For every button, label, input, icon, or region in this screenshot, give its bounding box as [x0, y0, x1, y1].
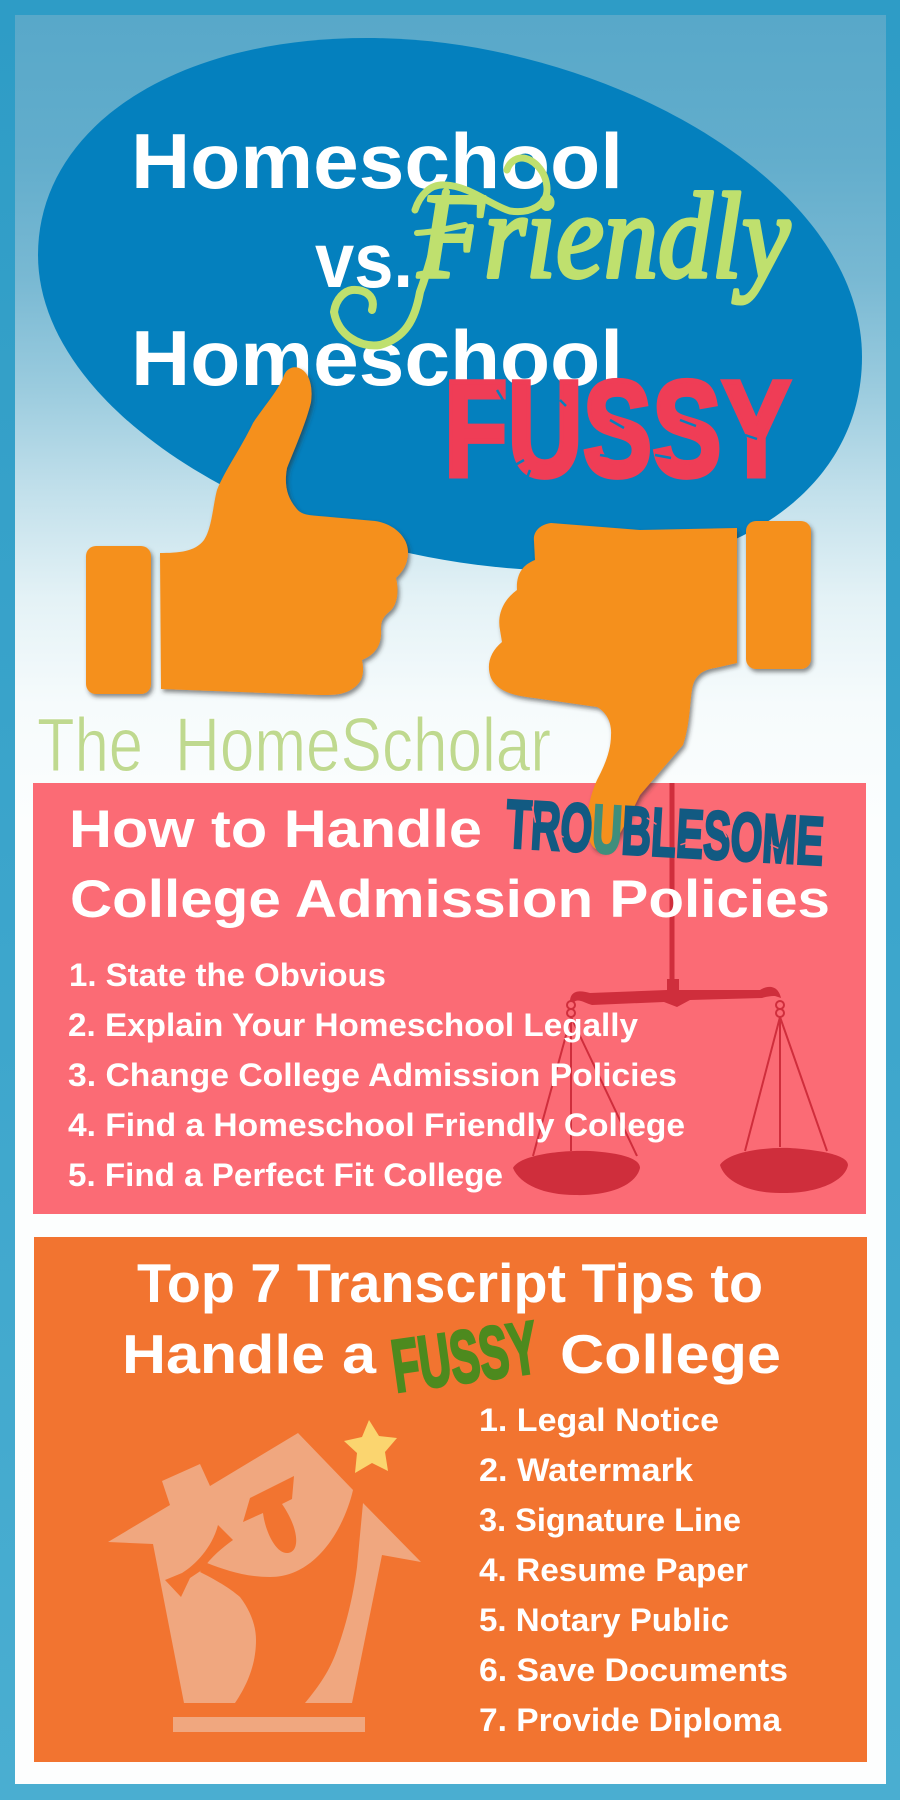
icon: thumbs up — [86, 367, 408, 695]
numbered list: 6. Save Documents — [479, 1652, 788, 1688]
numbered list: 4. Resume Paper — [479, 1552, 748, 1588]
title — [131, 117, 623, 402]
numbered list: 3. Change College Admission Policies — [68, 1057, 677, 1093]
numbered list — [68, 957, 685, 1193]
heading: How to Handle — [69, 800, 482, 859]
title: Homeschool — [131, 117, 623, 205]
logo text: The HomeScholar: The — [37, 703, 143, 788]
icon: star — [344, 1420, 397, 1473]
speech bubble — [38, 38, 862, 571]
panel: transcript tips — [34, 1237, 867, 1762]
panel: troublesome admission policies — [33, 783, 866, 1214]
numbered list: 5. Notary Public — [479, 1602, 729, 1638]
title: vs. — [315, 216, 413, 304]
heading: College — [560, 1323, 781, 1385]
heading: College Admission Policies — [70, 870, 830, 929]
word: FUSSY: FUSSY — [444, 353, 791, 506]
icon: balance scale — [513, 783, 848, 1195]
numbered list: 5. Find a Perfect Fit College — [68, 1157, 503, 1193]
numbered list: 3. Signature Line — [479, 1502, 741, 1538]
logo text: The HomeScholar: HomeScholar — [175, 703, 551, 788]
heading — [69, 800, 830, 929]
numbered list: 2. Explain Your Homeschool Legally — [68, 1007, 638, 1043]
logo text: The HomeScholar — [37, 703, 551, 788]
numbered list: 1. State the Obvious — [69, 957, 386, 993]
word: FUSSY green: FUSSY — [387, 1305, 543, 1408]
numbered list — [479, 1402, 788, 1738]
heading: Handle a — [122, 1323, 376, 1385]
numbered list: 1. Legal Notice — [479, 1402, 719, 1438]
word: Friendly — [334, 158, 791, 345]
title: Homeschool — [131, 314, 623, 402]
heading: Top 7 Transcript Tips to — [137, 1252, 763, 1314]
numbered list: 4. Find a Homeschool Friendly College — [68, 1107, 685, 1143]
heading — [122, 1252, 781, 1385]
icon: thumbs down — [489, 521, 811, 850]
icon: house logo — [108, 1433, 421, 1732]
numbered list: 7. Provide Diploma — [479, 1702, 781, 1738]
numbered list: 2. Watermark — [479, 1452, 693, 1488]
word: Friendly: Friendly — [417, 169, 791, 304]
